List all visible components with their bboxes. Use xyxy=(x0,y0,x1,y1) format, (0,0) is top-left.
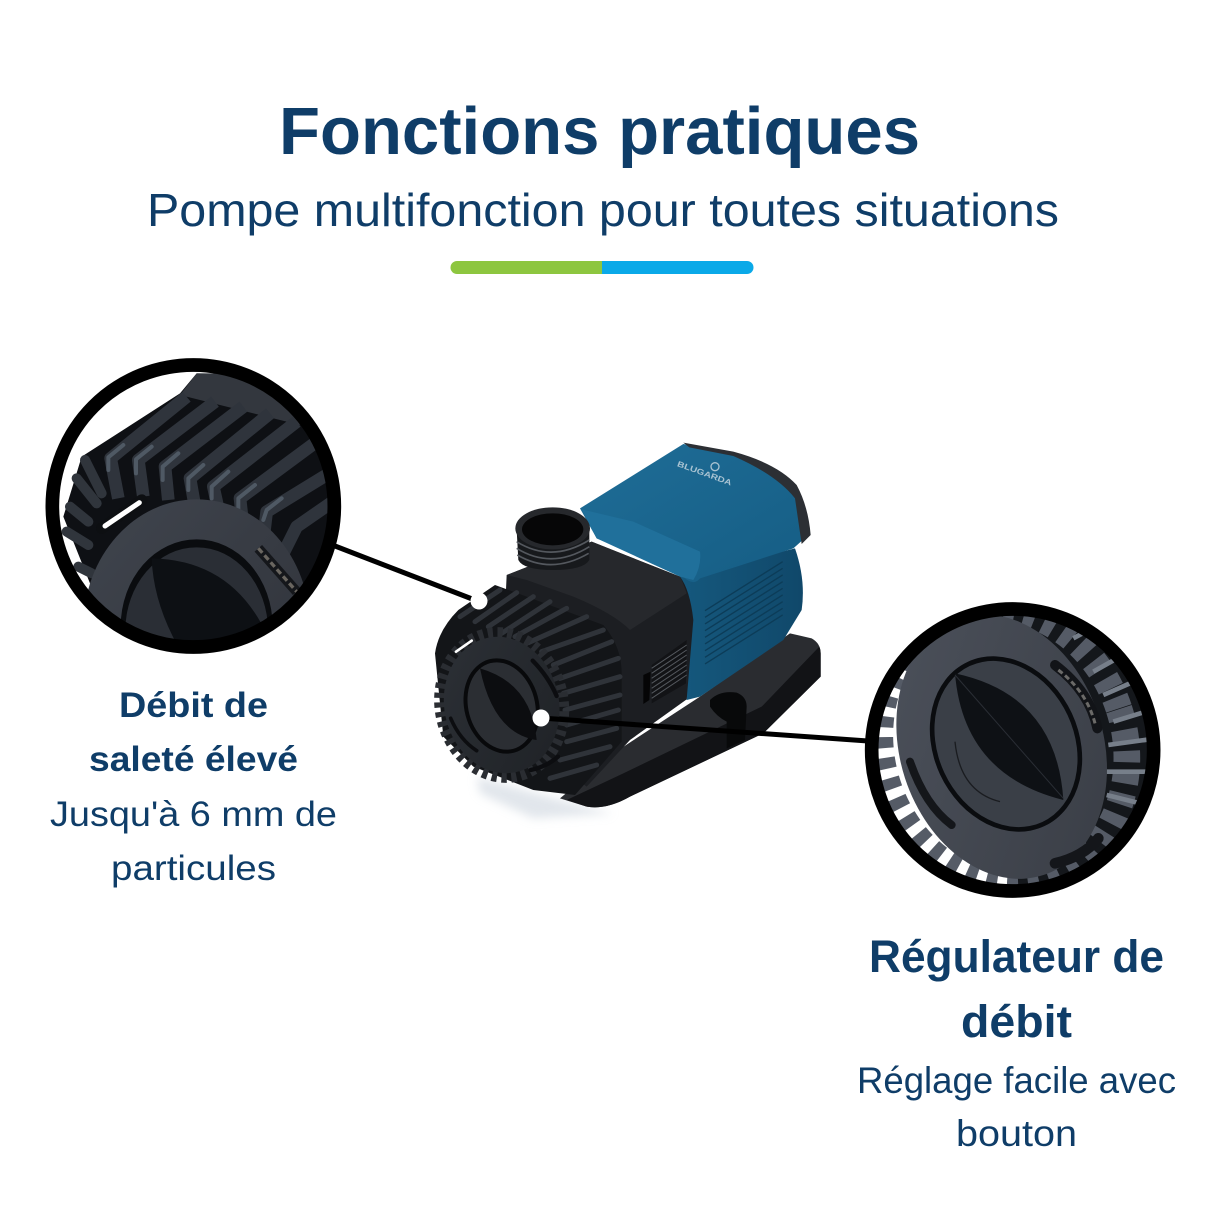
pump product illustration xyxy=(429,443,821,818)
anchor dot right xyxy=(532,710,550,726)
text: Débit de saleté élevé xyxy=(50,686,337,888)
text: Débit de saleté élevé: saleté élevé xyxy=(89,740,298,779)
outlet nozzle xyxy=(515,507,590,570)
text: Régulateur de débit: Régulateur de xyxy=(869,931,1164,982)
title: Fonctions pratiques xyxy=(279,94,920,169)
leader line right xyxy=(541,718,868,741)
grille teeth ring xyxy=(429,624,574,786)
accent divider bar xyxy=(450,261,754,274)
text: Régulateur de débit: débit xyxy=(961,996,1072,1047)
left callout xyxy=(50,365,488,888)
right callout xyxy=(532,576,1176,1154)
disc slots xyxy=(451,641,558,770)
text: Régulateur de débit: bouton xyxy=(956,1113,1077,1154)
zoom circle: grille detail xyxy=(46,358,342,654)
soft floor shadow xyxy=(477,777,613,818)
anchor dot left xyxy=(470,592,488,610)
ring xyxy=(52,365,334,647)
text: Débit de saleté élevé: Débit de xyxy=(119,686,268,725)
ring xyxy=(872,609,1154,891)
blue motor housing xyxy=(580,443,811,700)
text: Débit de saleté élevé: Jusqu'à 6 mm de xyxy=(50,795,337,834)
subtitle: Pompe multifonction pour toutes situations xyxy=(147,184,1059,236)
black middle housing xyxy=(500,542,693,787)
text: Régulateur de débit xyxy=(857,931,1176,1154)
leader line left xyxy=(335,546,480,602)
intake grille xyxy=(435,585,622,795)
side vents xyxy=(643,640,687,704)
zoom circle: flow regulator detail xyxy=(864,602,1160,898)
brand logo: BLUGARDA xyxy=(676,459,733,488)
front disc xyxy=(431,626,572,784)
flow knob xyxy=(453,650,550,762)
base plate xyxy=(560,633,821,807)
text: Débit de saleté élevé: particules xyxy=(111,849,276,888)
text: Régulateur de débit: Réglage facile avec xyxy=(857,1060,1176,1101)
